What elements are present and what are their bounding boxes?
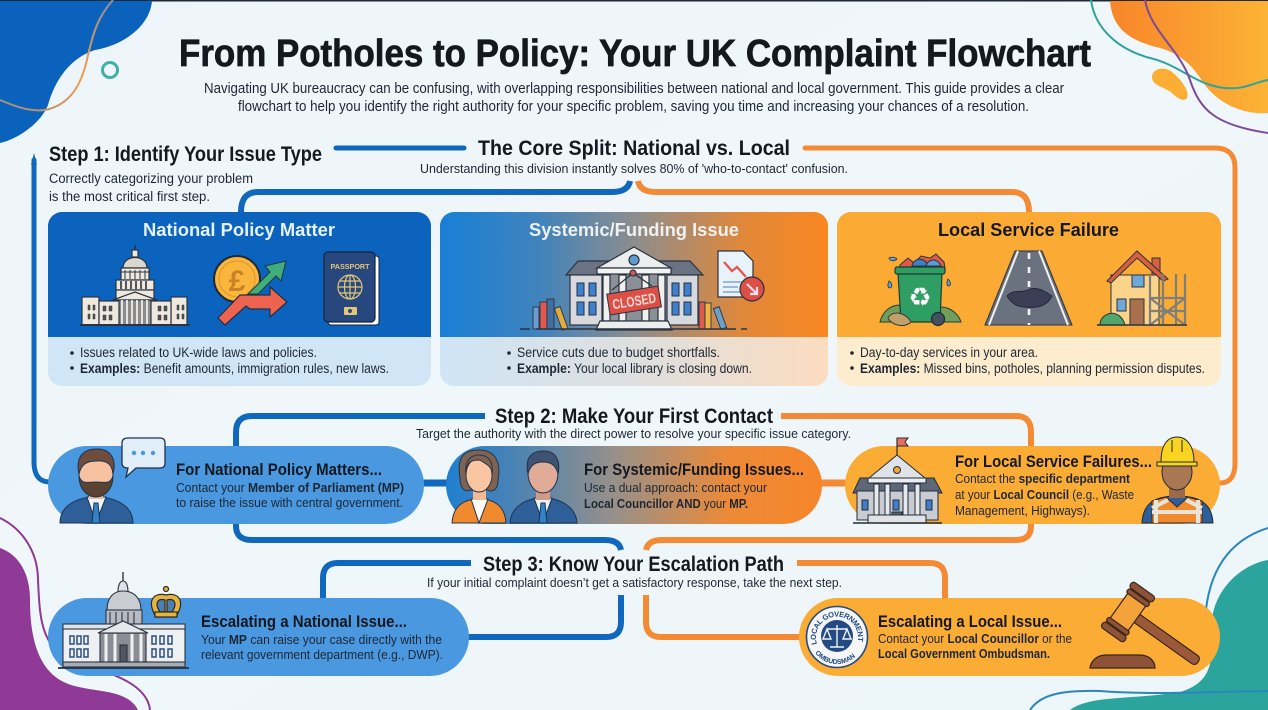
icon: ombudsman seal: OMBUDSMAN xyxy=(816,651,856,664)
decorative blob: top left xyxy=(0,0,152,143)
heading: step 3: Step 3: Know Your Escalation Path xyxy=(483,553,784,576)
text: step 3 description: If your initial complaint doesn’t get a satisfactory response, take the next step. xyxy=(427,575,842,590)
text: national escalation: relevant government department (e.g., DWP). xyxy=(201,647,443,662)
arrow: step 3 blue connectors xyxy=(323,563,621,637)
panel: national policy matter xyxy=(48,212,431,386)
icon: crown xyxy=(151,586,181,617)
text: step 1 description xyxy=(49,171,253,204)
text: local contact: at your Local Council (e.g., Waste xyxy=(955,487,1134,502)
icon: speech bubble xyxy=(122,438,165,477)
text: national escalation xyxy=(201,613,443,662)
heading: step 2: Step 2: Make Your First Contact xyxy=(495,405,773,428)
heading: national policy matter: National Policy Matter xyxy=(143,220,335,240)
text: local contact: For Local Service Failures... xyxy=(955,453,1152,471)
text: systemic contact: Local Councillor AND your MP. xyxy=(584,496,748,511)
panel: local service failure xyxy=(837,212,1221,386)
text: national contact: to raise the issue with central government. xyxy=(176,495,403,510)
panel: national contact pill xyxy=(48,438,424,524)
label: closed sign: CLOSED xyxy=(611,290,657,312)
icon: construction worker xyxy=(1142,437,1213,523)
icon: pound coin with arrows xyxy=(214,256,287,325)
label: closed sign xyxy=(607,286,661,315)
text: national escalation: Escalating a National Issue... xyxy=(201,613,407,631)
text: systemic contact xyxy=(584,461,804,511)
text: national bullets: Examples: Benefit amounts, immigration rules, new laws. xyxy=(80,361,389,376)
text: national escalation: Your MP can raise your case directly with the xyxy=(201,632,442,647)
intro text: flowchart to help you identify the right authority for your specific problem, saving you time and increasing your chances of a resolution. xyxy=(238,99,1029,115)
text: local bullets: Examples: Missed bins, potholes, planning permission disputes. xyxy=(860,361,1205,376)
icon: member of parliament xyxy=(510,451,577,523)
icon: parliament building xyxy=(80,245,190,325)
heading: step 1: Step 1: Identify Your Issue Type xyxy=(49,143,322,166)
decorative blob: top right xyxy=(1091,0,1268,133)
text: core split description: Understanding this division instantly solves 80% of 'who-to-contact' confusion. xyxy=(420,161,848,176)
decorative blob: bottom left xyxy=(0,518,150,710)
panel: systemic/funding issue xyxy=(440,212,828,386)
text: local contact xyxy=(955,453,1152,518)
text: national bullets xyxy=(70,345,389,376)
arrow: blue connector from core split to step 1 and national pill xyxy=(31,148,630,482)
icon: passport xyxy=(324,252,379,325)
text: systemic contact: For Systemic/Funding Issues... xyxy=(584,461,804,479)
icon: government building xyxy=(58,572,189,668)
intro text: Navigating UK bureaucracy can be confusing, with overlapping responsibilities between national and local government. This guide provides a clear xyxy=(204,81,1064,97)
icon: stacks of books xyxy=(520,299,747,330)
icon: ombudsman seal xyxy=(806,606,868,668)
icon: member of parliament xyxy=(60,449,133,523)
icon: overflowing recycling bin: ♻ xyxy=(908,283,932,313)
icon: local council building xyxy=(853,438,942,523)
icon: closed library xyxy=(566,247,703,330)
panel: national escalation pill xyxy=(48,572,469,676)
icon: house with scaffolding xyxy=(1097,251,1187,325)
text: systemic bullets xyxy=(507,345,752,376)
text: step 1 description: is the most critical first step. xyxy=(49,189,210,204)
decorative ring xyxy=(102,62,118,78)
arrow: step 3 orange connectors xyxy=(646,563,945,637)
panel: local contact pill xyxy=(845,437,1220,524)
text: local escalation: Contact your Local Councillor or the xyxy=(878,631,1072,646)
panel: local escalation pill xyxy=(799,582,1220,676)
arrow: step 2 orange connectors xyxy=(646,416,1031,550)
text: step 1 description: Correctly categorizing your problem xyxy=(49,171,253,186)
title: From Potholes to Policy: Your UK Complaint Flowchart xyxy=(179,33,1091,75)
arrow: orange connector from core split to local pill xyxy=(638,148,1235,483)
icon: councillor xyxy=(452,450,506,523)
heading: systemic/funding issue: Systemic/Funding Issue xyxy=(529,220,739,240)
icon: ombudsman seal: LOCAL GOVERNMENT xyxy=(810,611,864,645)
text: national contact: For National Policy Matters... xyxy=(176,461,382,479)
icon: budget report with down arrow xyxy=(718,251,764,301)
text: national contact: Contact your Member of Parliament (MP) xyxy=(176,480,404,495)
text: local bullets: Day-to-day services in your area. xyxy=(860,345,1038,360)
text: local contact: Contact the specific department xyxy=(955,471,1131,486)
heading: local service failure: Local Service Failure xyxy=(938,220,1119,240)
icon: overflowing recycling bin xyxy=(880,254,961,326)
icon: road with pothole xyxy=(985,251,1072,325)
text: systemic bullets: Service cuts due to budget shortfalls. xyxy=(517,345,720,360)
decorative blob: bottom right xyxy=(1030,528,1268,710)
text: local escalation: Local Government Ombudsman. xyxy=(878,646,1050,661)
icon: passport: PASSPORT xyxy=(330,262,370,271)
text: systemic contact: Use a dual approach: contact your xyxy=(584,480,768,495)
intro text xyxy=(204,81,1064,115)
icon: pound coin with arrows: £ xyxy=(229,265,246,298)
text: local escalation: Escalating a Local Issue... xyxy=(878,613,1062,631)
text: local bullets xyxy=(850,345,1205,376)
text: step 2 description: Target the authority with the direct power to resolve your specific issue category. xyxy=(416,426,851,441)
panel: systemic contact pill xyxy=(446,446,822,524)
heading: core split: The Core Split: National vs. Local xyxy=(478,136,790,160)
text: national bullets: Issues related to UK-wide laws and policies. xyxy=(80,345,317,360)
icon: gavel xyxy=(1090,581,1214,685)
text: local contact: Management, Highways). xyxy=(955,503,1090,518)
text: local escalation xyxy=(878,613,1072,661)
text: national contact xyxy=(176,461,404,510)
text: systemic bullets: Example: Your local library is closing down. xyxy=(517,361,752,376)
arrow: step 2 blue connectors xyxy=(236,416,621,550)
